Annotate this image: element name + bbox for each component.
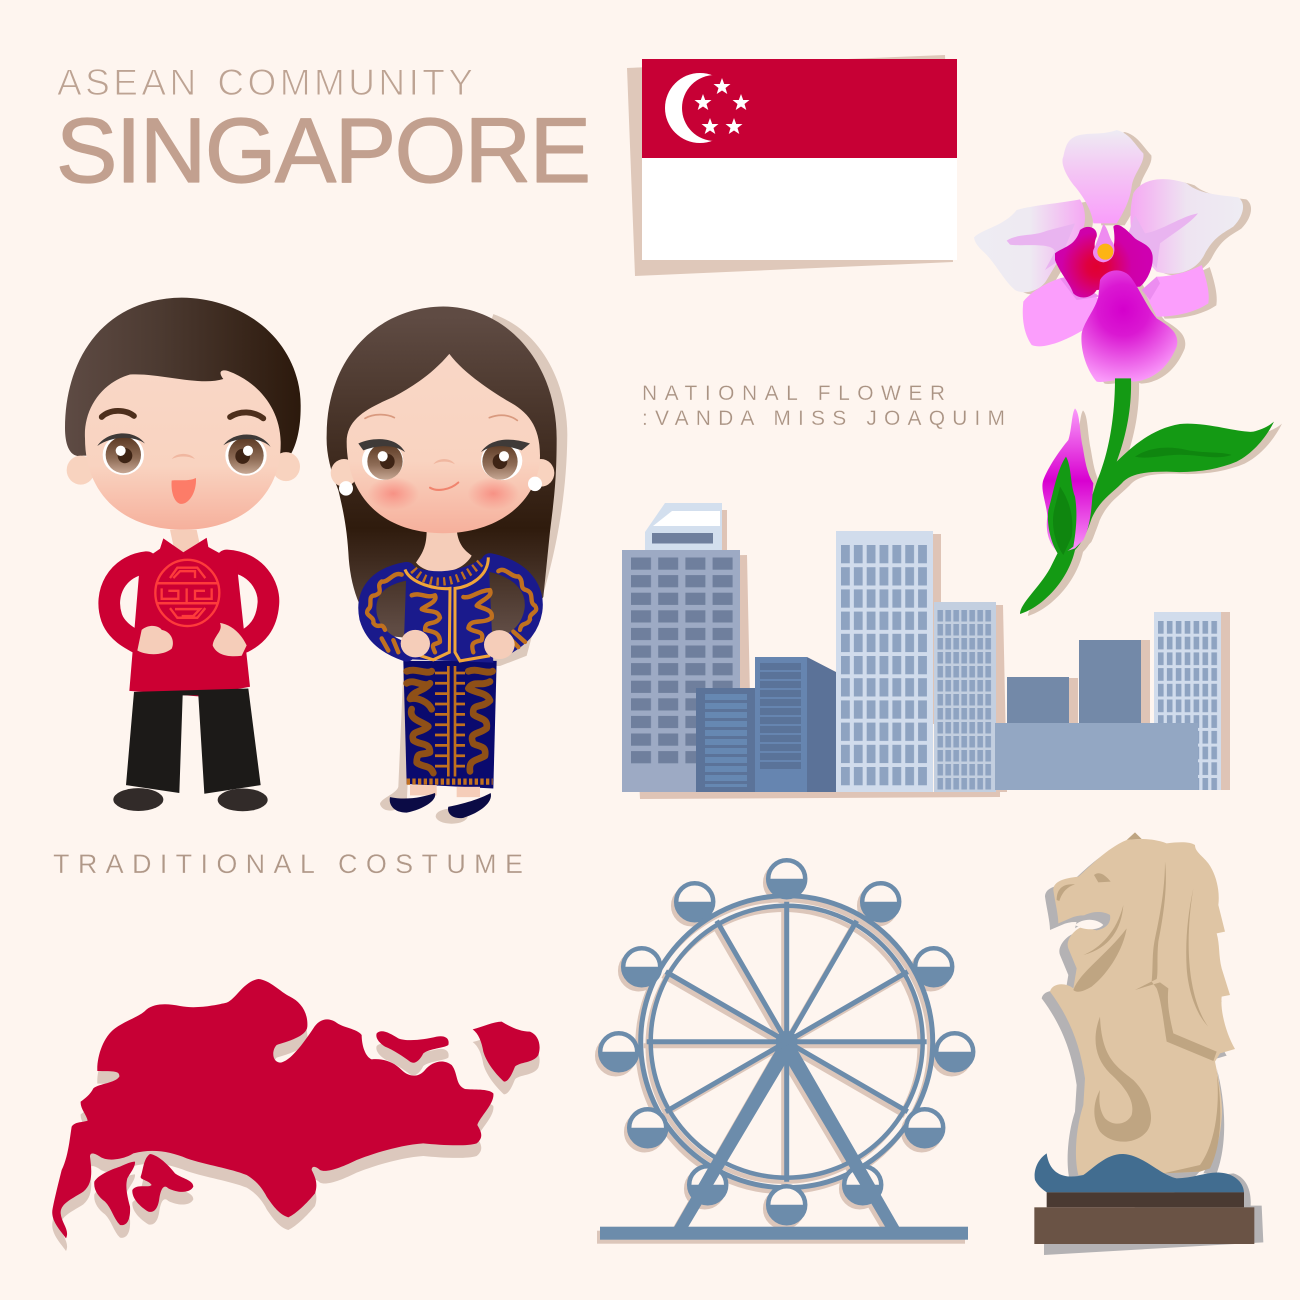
man hands <box>137 623 247 656</box>
jacket collar hatching <box>413 563 481 582</box>
red shirt <box>109 538 268 696</box>
stem and leaf <box>1020 378 1274 614</box>
flag of Singapore <box>627 55 957 276</box>
man neck <box>170 530 200 556</box>
orchid: Vanda Miss Joaquim <box>974 130 1282 616</box>
brown lower plinth <box>1034 1207 1254 1244</box>
right tower <box>1154 612 1221 790</box>
blue skirt <box>403 661 497 789</box>
Merlion statue <box>1034 832 1263 1255</box>
woman nose <box>433 459 455 464</box>
man right eye <box>223 434 271 476</box>
woman hands <box>401 630 515 659</box>
woman feet <box>410 785 480 797</box>
woman hair <box>327 307 557 649</box>
man face <box>85 370 281 530</box>
jacket gold trim <box>405 557 490 661</box>
statue carved details <box>1057 862 1220 1173</box>
statue shadow <box>1042 846 1263 1255</box>
flower column <box>1093 224 1114 262</box>
statue ear <box>1127 832 1142 840</box>
woman smile <box>430 483 458 490</box>
grey office tower <box>622 503 740 792</box>
statue body <box>1050 839 1235 1175</box>
blue water wave <box>1035 1153 1244 1192</box>
man eyebrows <box>102 411 263 418</box>
statue mouth <box>1075 912 1110 930</box>
label: traditional costume: TRADITIONAL COSTUME <box>53 849 523 879</box>
Singapore Flyer ferris wheel <box>597 860 973 1244</box>
title: Singapore: SINGAPORE <box>56 100 591 202</box>
black trousers <box>126 688 261 794</box>
lower petals <box>1023 265 1209 346</box>
woman cheeks <box>367 477 519 510</box>
woman earrings <box>339 477 542 496</box>
man ears <box>67 452 300 485</box>
woman eyebrows <box>365 415 517 420</box>
blue jacket <box>367 554 534 663</box>
flower bud <box>1042 408 1093 557</box>
blue low buildings <box>696 657 836 792</box>
building cityscape <box>622 503 1230 799</box>
man hair <box>65 298 301 456</box>
title: ASEAN Community: ASEAN COMMUNITY <box>57 62 473 103</box>
woman in kebaya <box>327 307 567 824</box>
woman right eye <box>481 440 530 480</box>
shirt emblem <box>155 560 219 626</box>
man left eye <box>97 433 145 475</box>
upper petals <box>974 130 1243 300</box>
woman shoes <box>390 793 491 818</box>
man mouth <box>172 478 196 504</box>
label: Vanda Miss Joaquim: :VANDA MISS JOAQUIM <box>642 407 1005 430</box>
man in traditional costume <box>65 298 301 811</box>
map of Singapore <box>52 979 540 1251</box>
flower lip <box>1055 225 1153 297</box>
jacket batik pattern <box>367 570 536 652</box>
woman face <box>347 354 540 533</box>
woman ears <box>331 459 554 487</box>
slate blocks and podium <box>995 640 1198 790</box>
medium light tower <box>934 602 996 792</box>
man shoes <box>113 788 268 811</box>
tall light tower <box>836 531 933 792</box>
man nose <box>172 454 195 459</box>
woman left eye <box>358 439 405 480</box>
dark upper plinth <box>1047 1192 1244 1207</box>
woman neck <box>416 530 472 572</box>
woman shadow <box>380 314 567 824</box>
label: national flower: NATIONAL FLOWER <box>642 382 945 405</box>
labellum <box>1081 270 1177 382</box>
